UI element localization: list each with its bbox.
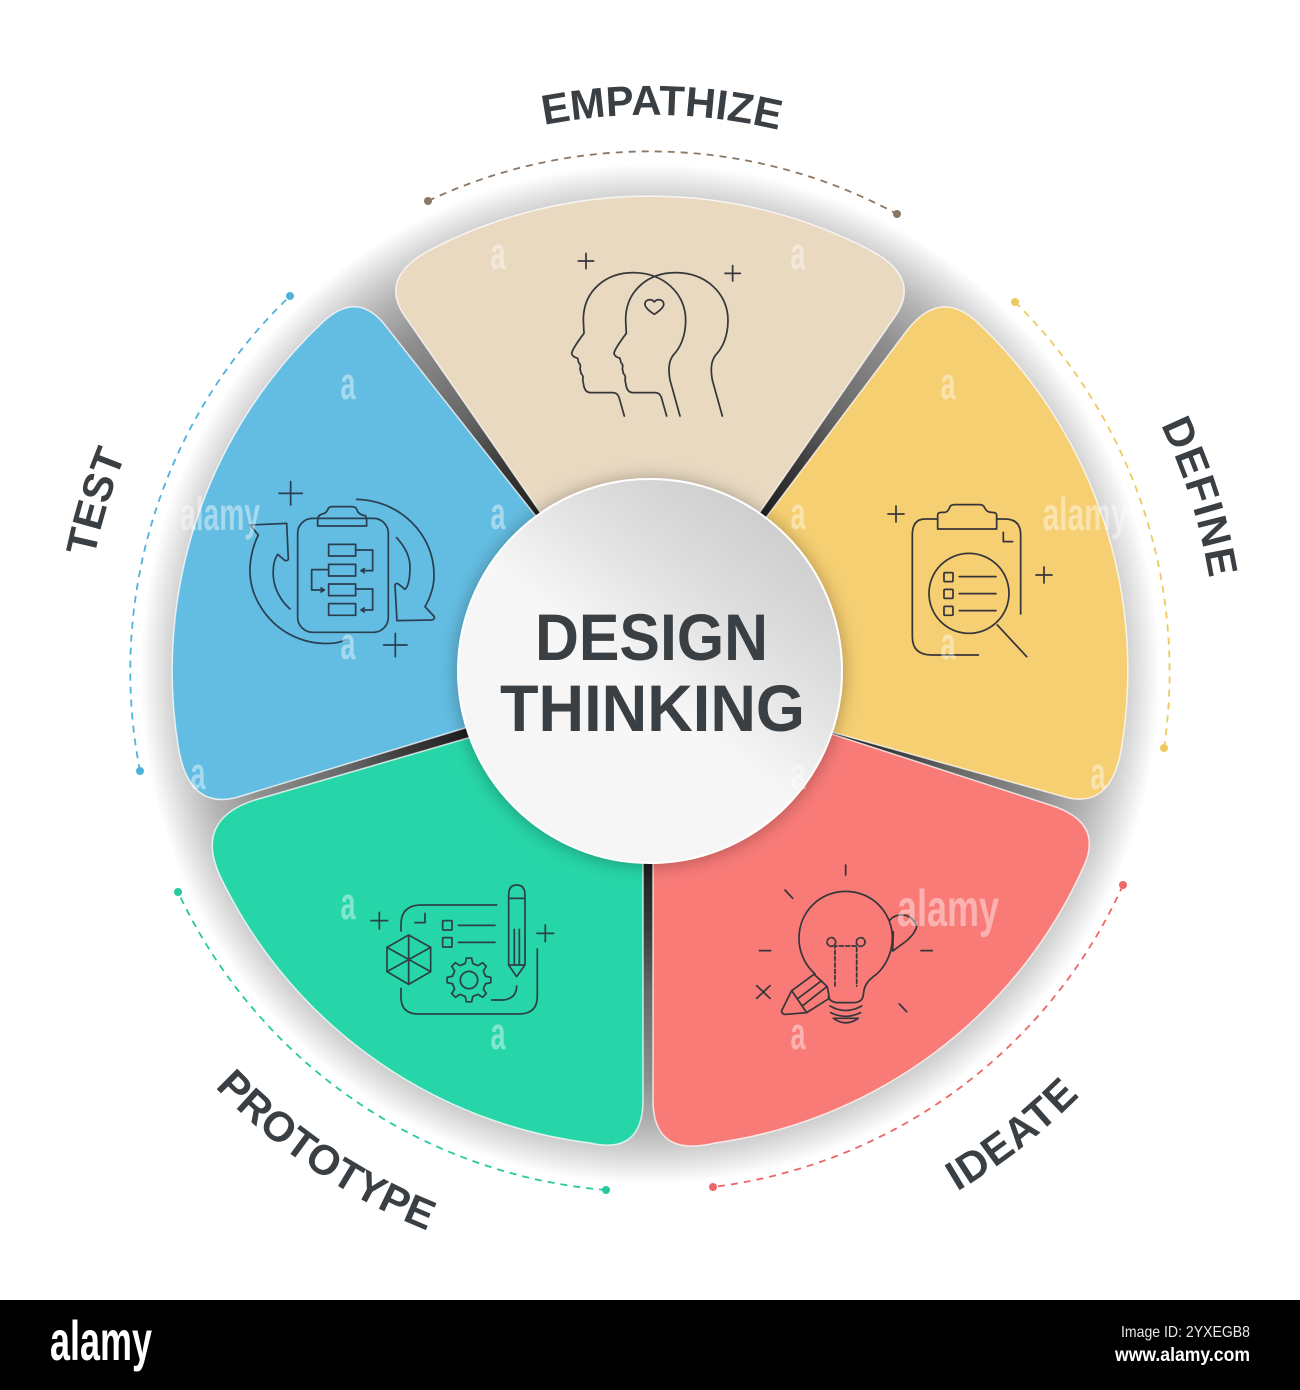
- icon: clipboard flow with cycle arrows: [250, 482, 434, 657]
- wheel segments: [172, 196, 1128, 1146]
- label: empathize: EMPATHIZE: [542, 86, 782, 130]
- icon: two heads with heart: [572, 253, 740, 416]
- watermarks: [180, 228, 1128, 1059]
- watermarks: a: [490, 488, 506, 539]
- label: ideate: IDEATE: [944, 1077, 1079, 1190]
- segment: ideate: [653, 671, 1089, 1146]
- arc: define: [1011, 298, 1170, 752]
- watermarks: alamy: [1042, 488, 1128, 540]
- watermarks: a: [340, 358, 356, 409]
- watermarks: alamy: [180, 488, 260, 540]
- arc: test: [130, 292, 294, 775]
- watermarks: a: [340, 618, 356, 669]
- arc: ideate: [709, 881, 1127, 1191]
- segment: prototype: [212, 671, 643, 1145]
- watermarks: a: [790, 748, 806, 799]
- segment: define: [650, 307, 1128, 799]
- icon: blueprint with cube, gear and pencil: [371, 885, 554, 1014]
- icon: clipboard with magnifier: [888, 505, 1052, 657]
- watermarks: a: [940, 358, 956, 409]
- label: define: DEFINE: [1162, 416, 1238, 577]
- watermarks: alamy: [897, 880, 999, 938]
- hub title: DESIGN: [535, 600, 768, 674]
- arc: empathize: [424, 151, 901, 218]
- watermarks: a: [790, 228, 806, 279]
- watermarks: a: [490, 1008, 506, 1059]
- footer image id: Image ID: 2YXEGB8: [1121, 1324, 1250, 1341]
- icon: light bulb with pencil: [757, 865, 932, 1023]
- watermarks: a: [790, 1008, 806, 1059]
- arc: prototype: [174, 888, 610, 1194]
- segment: empathize: [396, 196, 904, 671]
- hub title: THINKING: [500, 671, 805, 745]
- footer bar: [0, 1300, 1300, 1390]
- center hub: [458, 479, 842, 863]
- label: test: TEST: [66, 444, 122, 552]
- footer logo: alamy: [50, 1309, 152, 1372]
- watermarks: a: [340, 878, 356, 929]
- segment labels: [66, 86, 1238, 1230]
- shadow disc under the wheel: [140, 164, 1160, 1184]
- watermarks: a: [190, 748, 206, 799]
- watermarks: a: [1090, 748, 1106, 799]
- segment: test: [172, 307, 650, 799]
- label: prototype: PROTOTYPE: [216, 1068, 436, 1230]
- hub title: [500, 600, 805, 745]
- footer url: www.alamy.com: [1114, 1345, 1250, 1366]
- watermarks: a: [490, 228, 506, 279]
- watermarks: a: [790, 488, 806, 539]
- dashed arcs: [130, 151, 1170, 1194]
- watermarks: a: [940, 618, 956, 669]
